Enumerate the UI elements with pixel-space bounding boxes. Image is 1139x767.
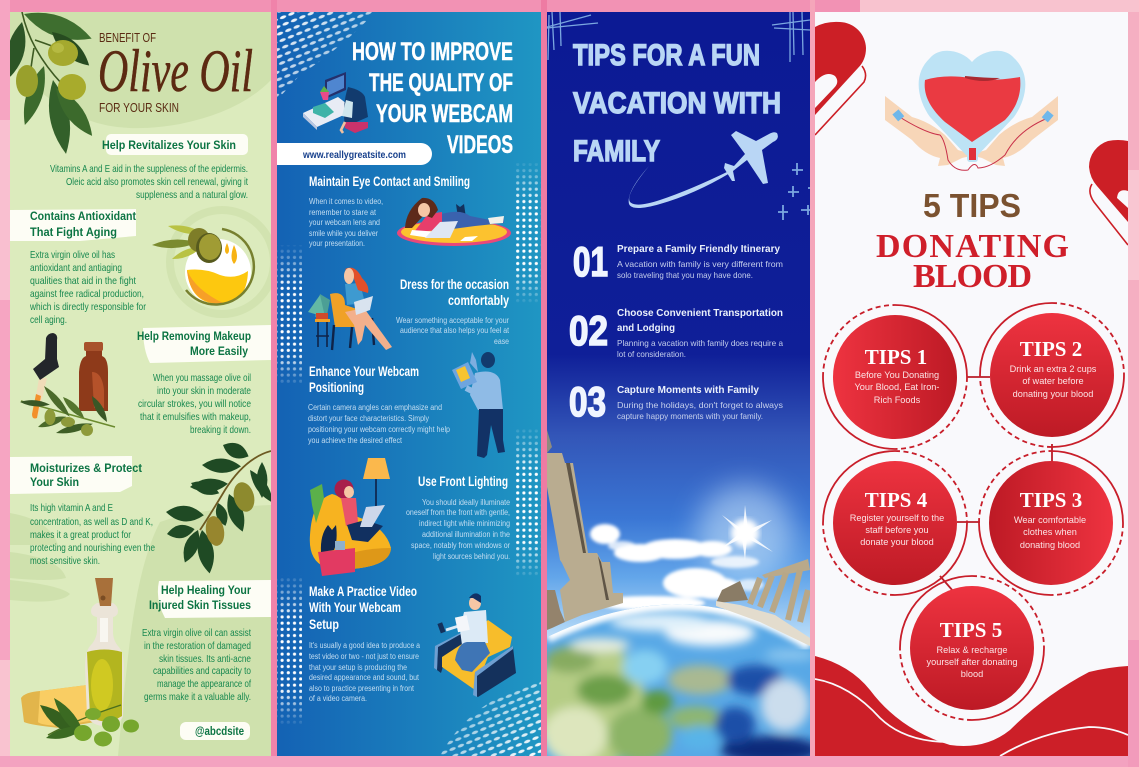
- section: removing makeup: circular strokes, you will notice: [138, 398, 251, 410]
- tip circle 1: [823, 305, 967, 449]
- panel: olive oil: [2, 4, 277, 756]
- icon: olive oil bottle with cheese: [21, 578, 139, 746]
- photo: skyscraper: [547, 430, 623, 630]
- badge: handle: [180, 722, 250, 740]
- section: front lighting: [406, 474, 510, 561]
- tip 01: 01: [573, 238, 608, 285]
- url pill: [277, 143, 432, 165]
- title: THE QUALITY OF: [369, 69, 513, 97]
- background shapes: [10, 12, 274, 756]
- section: healing: skin tissues. Its anti-acne: [159, 653, 251, 665]
- tip circle 2: TIPS 2: [1020, 337, 1082, 361]
- section: antioxidant: That Fight Aging: [30, 227, 117, 239]
- section: help revitalizes: Oleic acid also promotes skin cell renewal, giving it: [66, 176, 248, 188]
- tip circle 4: [823, 451, 967, 595]
- tip circle 3: [979, 451, 1123, 595]
- tip circle 2: [980, 303, 1124, 447]
- section: dress for the occasion: comfortably: [448, 293, 509, 308]
- title: BENEFIT OF: [99, 30, 156, 45]
- section: front lighting: You should ideally illuminate: [422, 498, 510, 507]
- title: HOW TO IMPROVE: [352, 38, 513, 66]
- section: practice video: that your setup is producing the: [309, 663, 407, 672]
- section: antioxidant: which is directly responsible for: [29, 301, 146, 313]
- title: Olive Oil: [98, 38, 253, 104]
- section: eye contact: smile while you deliver: [309, 229, 378, 238]
- tip circle 3: clothes when: [1023, 527, 1077, 537]
- tip 01: solo traveling that you may have done.: [617, 270, 753, 280]
- photo: sun and clouds: [590, 485, 793, 610]
- section: front lighting: Use Front Lighting: [418, 474, 508, 489]
- tip circle 3: Wear comfortable: [1014, 515, 1086, 525]
- section: healing: in the restoration of damaged: [144, 640, 251, 652]
- icon: dropper and serum bottle: [20, 333, 115, 436]
- tip 02: 02: [569, 307, 608, 354]
- section: healing: Extra virgin olive oil can assist: [142, 627, 251, 639]
- section: moisturizes: concentration, as well as D and K,: [30, 516, 153, 528]
- tip circle 3: donating blood: [1020, 540, 1080, 550]
- tip circle 2: Drink an extra 2 cups: [1010, 364, 1097, 374]
- tip circle 3: TIPS 3: [1020, 488, 1082, 512]
- icon: blood bag heart with hands: [885, 51, 1058, 170]
- section: moisturizes: Your Skin: [30, 477, 79, 489]
- section: removing makeup: [137, 325, 271, 436]
- tip circle 1: Before You Donating: [855, 370, 939, 380]
- section: moisturizes: most sensitive skin.: [30, 555, 100, 567]
- tip circle 2: of water before: [1022, 376, 1084, 386]
- title: [876, 187, 1069, 295]
- section: dress for the occasion: audience that also helps you feel at: [400, 326, 510, 335]
- section: practice video: With Your Webcam: [309, 600, 401, 615]
- title: [98, 30, 253, 115]
- url pill: www.reallygreatsite.com: [302, 150, 406, 161]
- section: help revitalizes: [50, 134, 248, 201]
- section: eye contact: Maintain Eye Contact and Smiling: [309, 174, 470, 189]
- title: FAMILY: [573, 135, 660, 168]
- section: practice video: test video or two - not just to ensure: [309, 652, 419, 661]
- icon: airplane with trail: [629, 131, 778, 208]
- section: moisturizes: makes it a great product for: [30, 529, 131, 541]
- decorative heart right: [1089, 140, 1128, 245]
- section: moisturizes: protecting and nourishing even the: [30, 542, 155, 554]
- section: removing makeup: into your skin in moderate: [157, 385, 251, 397]
- tip 03: During the holidays, don't forget to always: [617, 400, 783, 410]
- section: webcam positioning: positioning your webcam correctly might help: [308, 425, 450, 434]
- photo: earth: [547, 604, 810, 756]
- panel: webcam videos: [277, 12, 542, 756]
- tip 02: [569, 307, 783, 359]
- panel: family vacation: [535, 12, 820, 767]
- section: moisturizes: Moisturizes & Protect: [30, 463, 142, 475]
- section: antioxidant: cell aging.: [30, 314, 67, 326]
- tip 03: capture happy moments with your family.: [617, 411, 763, 421]
- section: webcam positioning: [308, 364, 450, 445]
- section: front lighting: light sources behind you.: [433, 552, 510, 561]
- title: FOR YOUR SKIN: [99, 100, 179, 115]
- section: front lighting: oneself from the front with gentle,: [406, 508, 510, 517]
- tip circle 5: TIPS 5: [940, 618, 1002, 642]
- title: VIDEOS: [447, 131, 513, 159]
- tip circle 2: donating your blood: [1013, 389, 1093, 399]
- section: eye contact: [309, 174, 470, 248]
- tip circle 1: TIPS 1: [865, 345, 927, 369]
- decorative hash marks: [547, 12, 810, 62]
- icon: olive branch top: [10, 12, 92, 154]
- section: front lighting: space, notably from windows or: [411, 541, 510, 550]
- section: healing: capabilities and capacity to: [153, 665, 251, 677]
- connectors: [940, 377, 1052, 591]
- section: front lighting: indirect light while minimizing: [419, 519, 510, 528]
- tip circle 4: TIPS 4: [865, 488, 928, 512]
- illustration: man with webcam: [452, 352, 505, 458]
- illustration: woman in chair: [308, 268, 392, 350]
- section: eye contact: remember to stare at: [309, 208, 377, 217]
- section: removing makeup: More Easily: [190, 346, 249, 358]
- section: webcam positioning: Enhance Your Webcam: [309, 364, 419, 379]
- section: dress for the occasion: Dress for the occasion: [400, 277, 509, 292]
- section: front lighting: additional illumination in the: [422, 530, 510, 539]
- bottom wave: [815, 656, 1128, 756]
- tip circle 5: Relax & recharge: [937, 645, 1007, 655]
- panel: donating blood: [815, 12, 1128, 756]
- section: webcam positioning: you achieve the desired effect: [308, 436, 403, 445]
- section: eye contact: your webcam lens and: [309, 218, 380, 227]
- tip 02: lot of consideration.: [617, 349, 686, 359]
- section: removing makeup: When you massage olive oil: [153, 372, 251, 384]
- tip 02: and Lodging: [617, 322, 675, 334]
- section: healing: Help Healing Your: [161, 585, 251, 597]
- section: dress for the occasion: Wear something acceptable for your: [396, 316, 509, 325]
- section: antioxidant: antioxidant and antiaging: [30, 262, 122, 274]
- tip 02: Choose Convenient Transportation: [617, 307, 783, 319]
- tip circle 5: yourself after donating: [927, 657, 1017, 667]
- section: removing makeup: that it emulsifies with makeup,: [140, 411, 251, 423]
- illustration: person at desk: [303, 72, 368, 133]
- section: healing: [142, 580, 271, 703]
- tip 02: Planning a vacation with family does require a: [617, 338, 783, 348]
- section: practice video: of a video camera.: [309, 694, 367, 703]
- section: antioxidant: [10, 209, 146, 326]
- section: webcam positioning: Positioning: [309, 380, 364, 395]
- section: practice video: Make A Practice Video: [309, 584, 417, 599]
- title: DONATING: [876, 228, 1069, 265]
- section: practice video: desired appearance and sound, but: [309, 673, 420, 682]
- section: practice video: [309, 584, 420, 703]
- title: TIPS FOR A FUN: [573, 39, 760, 72]
- section: eye contact: When it comes to video,: [309, 197, 383, 206]
- section: practice video: Setup: [309, 617, 339, 632]
- tip 03: [570, 386, 783, 420]
- section: help revitalizes: Help Revitalizes Your Skin: [102, 140, 236, 152]
- illustration: girl on rug: [397, 198, 511, 246]
- tip circle 4: staff before you: [865, 525, 929, 535]
- section: help revitalizes: Vitamins A and E aid in the suppleness of the epidermis.: [50, 163, 248, 175]
- section: dress for the occasion: [396, 277, 510, 346]
- section: practice video: It's usually a good idea to produce a: [309, 641, 420, 650]
- tip circle 4: donate your blood: [860, 537, 934, 547]
- section: healing: manage the appearance of: [157, 678, 251, 690]
- title: YOUR WEBCAM: [376, 100, 513, 128]
- section: webcam positioning: distort your face characteristics. Simply: [308, 414, 429, 423]
- illustration: woman on bean bag: [310, 458, 391, 576]
- title: BLOOD: [913, 258, 1032, 295]
- section: antioxidant: Contains Antioxidant: [30, 211, 136, 223]
- tip 03: Capture Moments with Family: [617, 384, 759, 396]
- section: practice video: also to practice presenting in front: [309, 684, 415, 693]
- title: [573, 39, 781, 168]
- section: webcam positioning: Certain camera angles can emphasize and: [308, 403, 442, 412]
- tip 01: Prepare a Family Friendly Itinerary: [617, 243, 780, 255]
- section: eye contact: your presentation.: [309, 239, 365, 248]
- tip circle 5: blood: [961, 669, 983, 679]
- section: help revitalizes: suppleness and a natural glow.: [136, 189, 248, 201]
- section: antioxidant: Extra virgin olive oil has: [30, 249, 115, 261]
- decorative heart top-left: [815, 22, 866, 135]
- section: antioxidant: against free radical production,: [30, 288, 144, 300]
- section: healing: germs make it a valuable ally.: [144, 691, 251, 703]
- icon: oil circle with olives: [152, 223, 254, 305]
- tip circle 1: Rich Foods: [874, 395, 921, 405]
- section: moisturizes: Its high vitamin A and E: [30, 502, 113, 514]
- section: healing: Injured Skin Tissues: [149, 600, 251, 612]
- title: 5 TIPS: [923, 187, 1021, 224]
- tip 03: 03: [569, 378, 606, 425]
- section: moisturizes: [10, 456, 155, 567]
- tip 01: [574, 244, 782, 280]
- section: dress for the occasion: ease: [494, 337, 509, 346]
- section: removing makeup: breaking it down.: [190, 424, 251, 436]
- decorative plus signs: [778, 163, 813, 220]
- photo: ancient temple: [716, 559, 810, 646]
- tip circle 5: [900, 576, 1044, 720]
- title: [352, 38, 513, 159]
- tip 01: A vacation with family is very different from: [617, 259, 783, 269]
- halftone decorations: [277, 12, 542, 756]
- tip circle 1: Your Blood, Eat Iron-: [855, 382, 939, 392]
- title: VACATION WITH: [573, 87, 781, 120]
- illustration: man on sofa: [434, 593, 516, 697]
- section: removing makeup: Help Removing Makeup: [137, 331, 251, 343]
- tip circle 4: Register yourself to the: [850, 513, 944, 523]
- icon: olive branch right: [165, 438, 277, 575]
- badge: handle: @abcdsite: [195, 726, 244, 738]
- section: antioxidant: qualities that aid in the fight: [30, 275, 136, 287]
